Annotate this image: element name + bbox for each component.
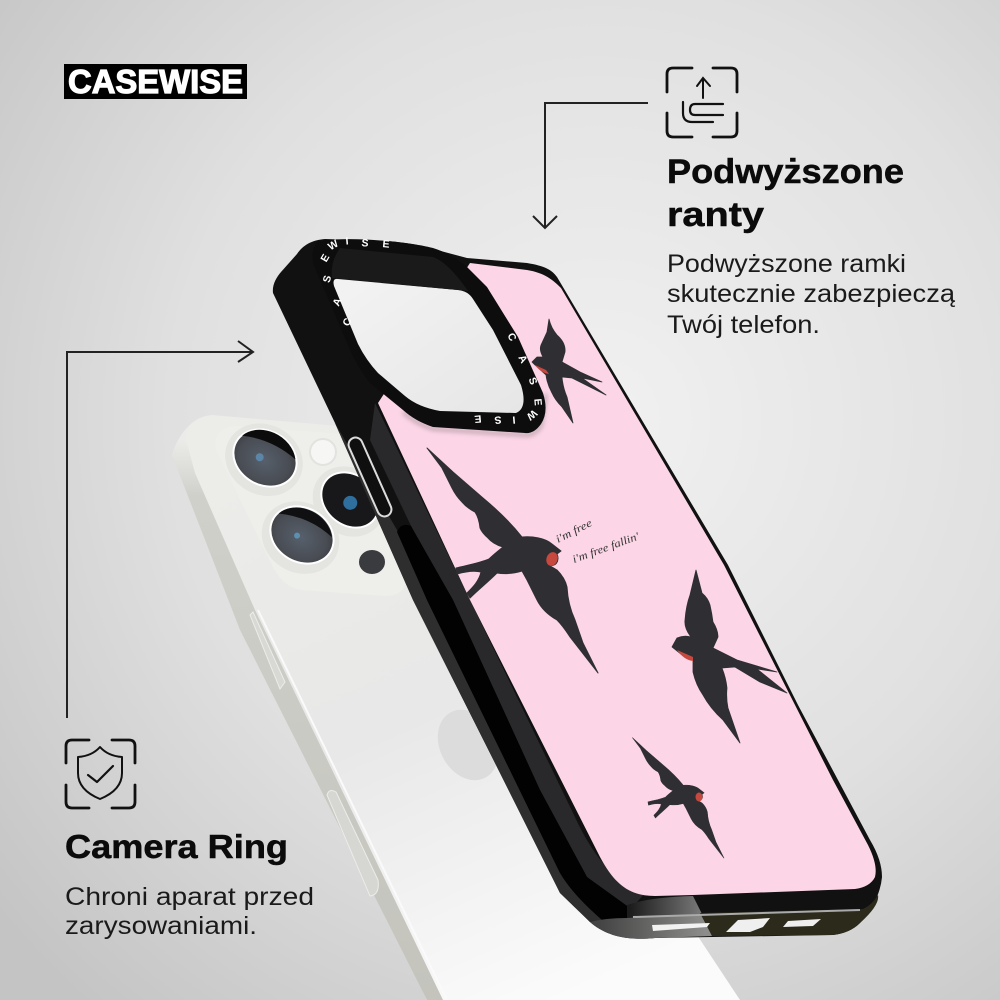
ring lettering: C [340,316,355,328]
silver phone behind the case [172,409,740,1000]
ring lettering: S [361,237,369,250]
outer side strip [335,423,602,922]
throat [535,365,549,374]
icon: raised layers [667,68,737,137]
ring lettering: E [531,398,544,406]
inner lip [332,248,468,291]
lens two [298,452,399,551]
text: raised edges description: Podwyższone ramki [667,250,906,278]
highlight strip [258,610,447,1000]
case shell [273,239,882,939]
phone back [172,415,740,1000]
throat [677,650,693,661]
ring lettering: W [326,238,341,253]
throat [696,792,702,802]
camera plateau [215,426,405,596]
heading: Camera Ring: Camera Ring [65,828,288,865]
ring lettering: E [382,238,390,251]
swallow bottom [632,738,724,858]
port three [783,919,821,927]
heading: Podwyższone ranty: ranty [667,196,764,234]
ring lettering: A [330,296,345,308]
side button lower [327,791,378,896]
text: raised edges description: Twój telefon. [667,311,820,339]
ring lettering: E [474,412,482,425]
port one [652,923,710,931]
apple logo [426,699,510,791]
throat [544,551,560,567]
lens one [212,409,316,510]
chin highlight [633,910,860,917]
side slot [397,525,630,920]
ring shadow [403,394,546,435]
camera ring [313,235,546,433]
black phone case [273,239,882,939]
swallow large with script text [427,448,641,673]
swallow top [532,319,606,423]
ring [313,239,546,433]
text: raised edges description: skutecznie zabezpieczą [667,280,955,308]
text: camera ring description: Chroni aparat przed [65,883,314,911]
lens three [248,487,353,588]
lidar sensor [359,550,385,574]
heading: Podwyższone ranty: Podwyższone [667,153,904,191]
script text [554,517,641,566]
camera window [334,279,524,413]
heading: Podwyższone ranty [667,153,904,234]
ring lettering: I [512,413,516,426]
icon: shield check [66,740,135,808]
script text: i'm free fallin' [571,530,641,566]
chin dark gradient left [627,896,702,918]
phone side band [172,423,443,1000]
text: raised edges description [667,250,955,339]
ring lettering: I [345,235,349,248]
chin left translucent [590,914,712,939]
port two [726,918,770,932]
text: camera ring description: zarysowaniami. [65,912,257,940]
ring lettering: S [526,376,539,387]
side button on case [346,435,394,519]
chin right [700,895,878,936]
ring lettering [318,235,544,426]
brand logo: CASEWISE: CASEWISE [68,63,243,100]
ring lettering: W [524,407,539,422]
pink back panel [378,263,876,896]
swallow right [672,570,787,743]
script text: i'm free [554,517,594,546]
arrow to camera ring [67,341,253,718]
ring lettering: S [494,413,502,426]
ring lettering: S [321,274,334,284]
ring lettering: A [515,353,530,366]
side button upper [250,612,285,689]
arrow to raised edges [533,103,648,228]
text: camera ring description [65,883,314,940]
flash [310,439,336,465]
ring lettering: C [504,331,519,344]
ring lettering: E [318,252,332,264]
inner side strip [370,403,645,910]
